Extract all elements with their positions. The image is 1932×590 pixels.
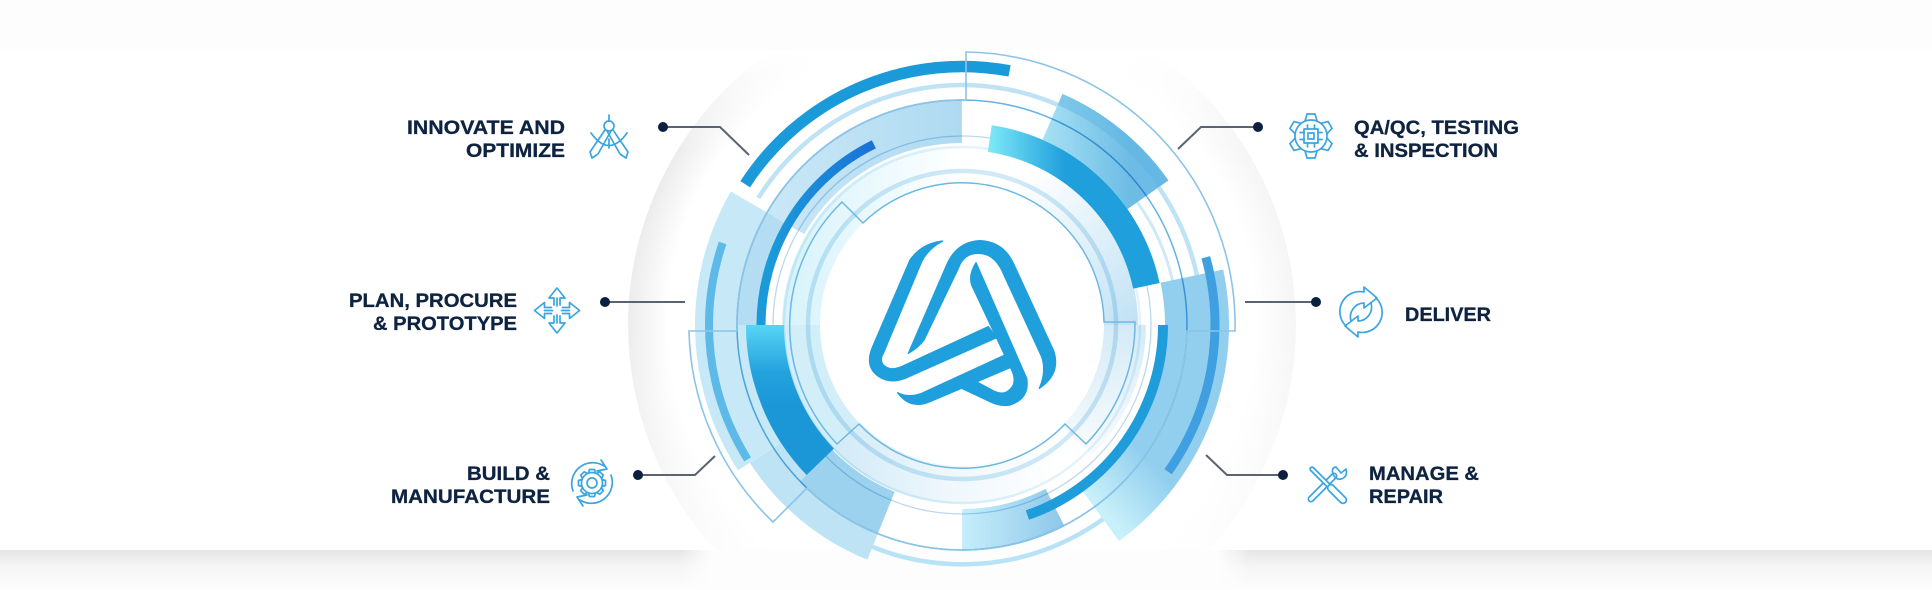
label: build and manufacture: MANUFACTURE <box>391 486 550 508</box>
shadow soft end left <box>680 550 712 590</box>
thin rings <box>737 100 1187 550</box>
label: qa/qc, testing and inspection <box>1354 117 1519 162</box>
halo right <box>962 52 1296 550</box>
label: innovate and optimize <box>407 117 565 162</box>
top bright arc <box>745 66 1010 184</box>
central logo <box>870 241 1056 405</box>
label: build and manufacture: BUILD & <box>467 463 550 485</box>
icon: refresh arrows <box>1340 287 1382 337</box>
panel shadow right <box>1218 550 1932 590</box>
label: qa/qc, testing and inspection: QA/QC, TESTING <box>1354 117 1519 139</box>
icon: four-way arrows <box>534 288 580 333</box>
leader: innovate <box>658 122 749 155</box>
icon: compass <box>590 115 628 158</box>
leader: qa <box>1178 122 1263 149</box>
label: deliver: DELIVER <box>1405 304 1491 326</box>
label: innovate and optimize: INNOVATE AND <box>407 117 565 139</box>
halo fade <box>600 52 1330 550</box>
pale outer rings <box>758 85 1198 564</box>
inner notched frame <box>790 183 1135 468</box>
halo left <box>628 52 962 550</box>
label: manage and repair: MANAGE & <box>1369 463 1479 485</box>
leader: plan <box>600 297 685 307</box>
circular diagram <box>689 52 1235 578</box>
icon: wrench and screwdriver <box>1311 467 1346 500</box>
panel shadow left <box>0 550 712 590</box>
label: plan, procure and prototype: PLAN, PROCURE <box>349 290 517 312</box>
bold arcs <box>709 72 1215 578</box>
label: qa/qc, testing and inspection: & INSPECTION <box>1354 140 1498 162</box>
label: build and manufacture <box>391 463 550 508</box>
leader: build <box>633 456 715 480</box>
label: manage and repair: REPAIR <box>1369 486 1443 508</box>
label: plan, procure and prototype <box>349 290 517 335</box>
icon: gear with chip <box>1289 114 1333 158</box>
icon: gear with cycle arrows <box>572 460 612 506</box>
label: innovate and optimize: OPTIMIZE <box>466 140 565 162</box>
wedges <box>716 79 1208 571</box>
outer notched frame <box>689 52 1235 550</box>
pale inner wedges <box>799 162 1125 488</box>
label: manage and repair <box>1369 463 1479 508</box>
leader: deliver <box>1245 297 1321 307</box>
shadow soft end right <box>1218 550 1250 590</box>
leader: manage <box>1206 455 1288 480</box>
label: plan, procure and prototype: & PROTOTYPE <box>373 313 517 335</box>
